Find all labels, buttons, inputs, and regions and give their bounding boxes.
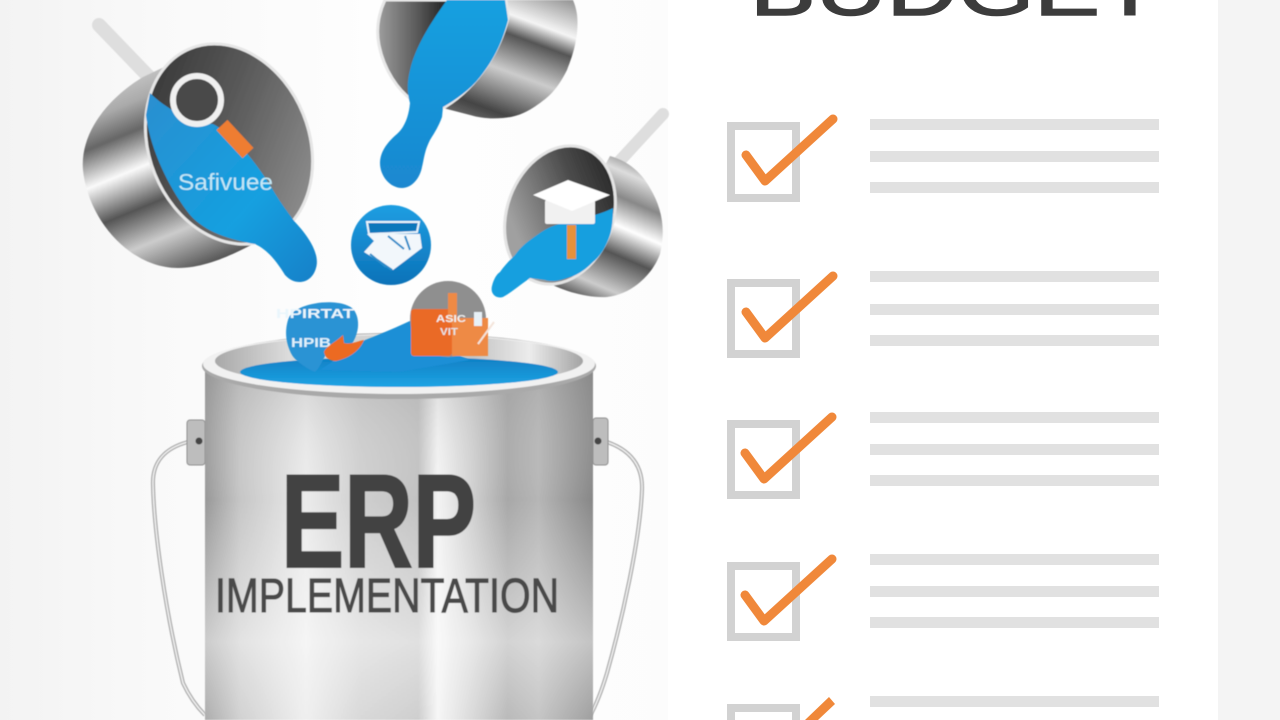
icon: graduation cap: [533, 180, 610, 259]
paint surface: [240, 357, 558, 387]
checklist row 3: [731, 412, 1159, 495]
checklist row 2: [731, 271, 1159, 354]
bucket lugs: [187, 418, 608, 465]
blue blob with label: [276, 302, 364, 372]
bucket: [187, 333, 608, 720]
grey circle with orange blocks: ASIC: [436, 314, 466, 325]
pot: top centre: [378, 0, 578, 188]
label: erp: ERP: [281, 448, 476, 596]
paint blob with icons: [276, 281, 494, 372]
blue blob with label: HPIB: [291, 335, 331, 350]
checklist row 4: [731, 554, 1159, 637]
label: implementation: IMPLEMENTATION: [215, 570, 559, 623]
checklist row 1: [731, 119, 1159, 198]
panel: budget checklist paper: [668, 0, 1280, 720]
icon: handshake badge: [351, 205, 431, 285]
pot: software: [83, 19, 342, 282]
icon: magnifying glass: [173, 76, 248, 153]
checklist row 5: [727, 696, 1159, 720]
bucket handle wire: [153, 442, 642, 716]
pot: graduation right: [486, 114, 663, 300]
blue blob with label: HPIRTAT: [276, 306, 354, 321]
grey circle with orange blocks: [410, 281, 494, 357]
grey circle with orange blocks: VIT: [440, 327, 458, 338]
label: software text: Safivuee: [178, 169, 273, 195]
